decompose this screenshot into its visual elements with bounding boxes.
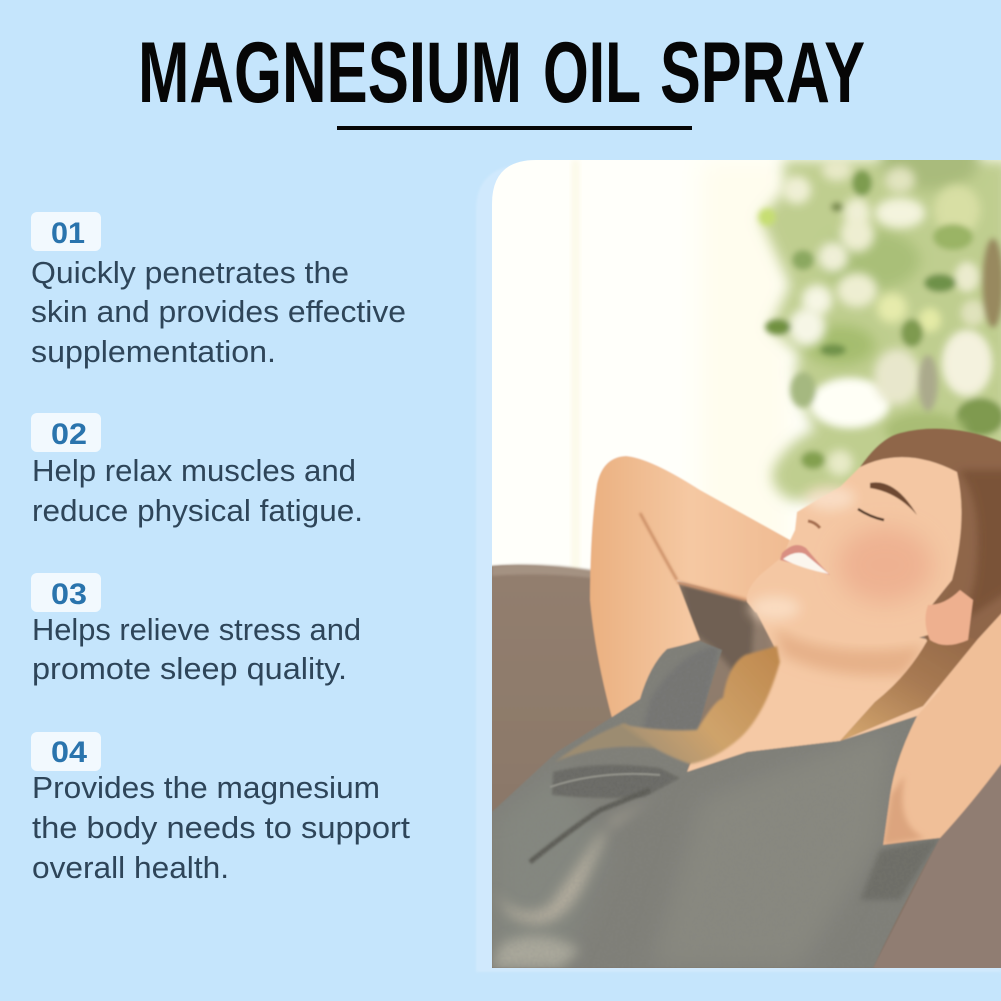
text 01: Quickly penetrates the xyxy=(31,255,349,290)
text 03 xyxy=(32,612,361,686)
text 04: overall health. xyxy=(32,850,229,885)
title: SPRAY xyxy=(660,25,865,121)
text 04: the body needs to support xyxy=(32,810,410,845)
item 01 xyxy=(31,212,406,369)
item 02 xyxy=(31,413,363,528)
item 03 xyxy=(31,573,361,686)
text 02 xyxy=(32,453,363,528)
text 04: Provides the magnesium xyxy=(32,770,380,805)
title: OIL xyxy=(543,25,641,121)
title: MAGNESIUM xyxy=(138,25,522,121)
face xyxy=(747,457,961,644)
left arm (behind head) xyxy=(590,456,790,718)
nostril xyxy=(808,521,820,528)
badge 01 xyxy=(31,212,101,251)
photo backing edge xyxy=(476,164,1001,972)
badge 04 xyxy=(31,732,101,771)
badge 02 xyxy=(31,413,101,452)
text 01: supplementation. xyxy=(31,334,276,369)
text 03: Helps relieve stress and xyxy=(32,612,361,647)
badge 02: 02 xyxy=(51,418,87,451)
eyebrow xyxy=(870,482,917,515)
closed eye xyxy=(858,509,884,520)
sofa xyxy=(490,565,1001,980)
neck and chest xyxy=(687,600,940,772)
ear xyxy=(925,590,973,645)
text 03: promote sleep quality. xyxy=(32,651,347,686)
text 02: reduce physical fatigue. xyxy=(32,493,363,528)
blonde hair over neck and shirt xyxy=(620,646,780,764)
smile xyxy=(780,545,830,575)
item 04 xyxy=(31,732,410,885)
text 04 xyxy=(32,770,410,885)
badge 03 xyxy=(31,573,101,612)
right arm (raised) xyxy=(883,604,1001,845)
badge 01: 01 xyxy=(51,217,85,250)
foliage xyxy=(758,130,1001,500)
text 01 xyxy=(31,255,406,369)
loose hair strand xyxy=(558,723,652,760)
badge 04: 04 xyxy=(51,736,87,769)
photo: woman relaxing on sofa xyxy=(480,130,1001,980)
title underline xyxy=(337,126,692,130)
hair xyxy=(840,429,1001,741)
shirt xyxy=(492,641,939,968)
window and curtain background xyxy=(492,160,1001,582)
text 01: skin and provides effective xyxy=(31,294,406,329)
badge 03: 03 xyxy=(51,578,87,611)
text 02: Help relax muscles and xyxy=(32,453,356,488)
